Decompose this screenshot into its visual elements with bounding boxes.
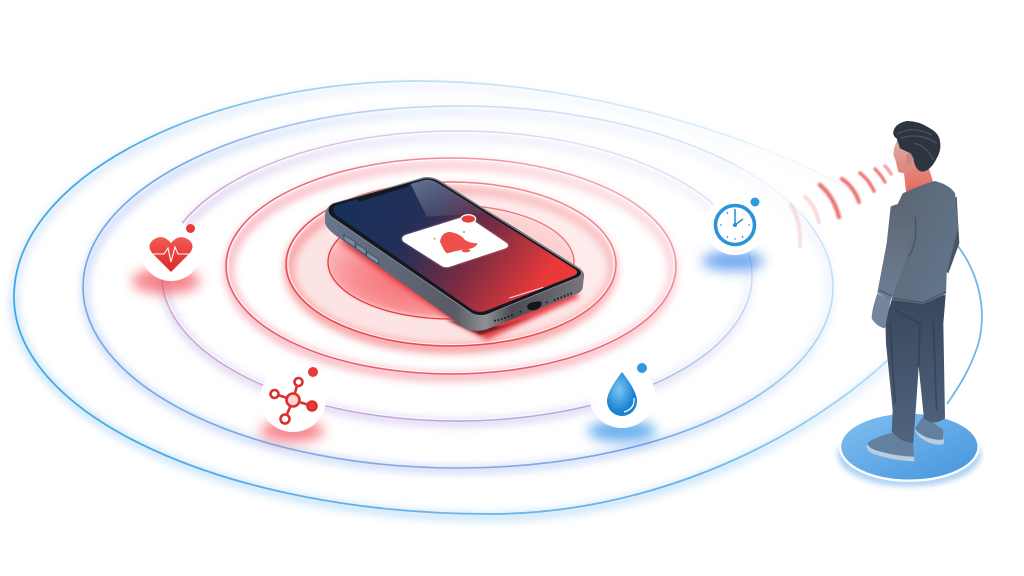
- sound waves toward person: [791, 166, 891, 246]
- hair: [893, 121, 940, 172]
- bell icon: [440, 232, 478, 253]
- ring 4: pink red: [226, 158, 676, 377]
- icon: heart badge: [132, 221, 201, 294]
- neck and face: [893, 139, 933, 192]
- sweater folds: [879, 217, 946, 303]
- ear: [906, 153, 912, 165]
- sweater torso: [892, 181, 958, 304]
- alert card: [402, 215, 508, 267]
- hair strands: [897, 130, 937, 160]
- icon: clock badge: [702, 195, 765, 271]
- ring 1: outer blue: [14, 81, 888, 517]
- icon: water drop badge: [588, 362, 656, 442]
- screen sheen: [411, 180, 487, 217]
- infographic scene: [6, 80, 984, 526]
- phone glow shadow: [337, 240, 580, 340]
- wave arcs: [791, 166, 891, 246]
- person on platform: [838, 121, 981, 487]
- ring 1 right arc behind person: [947, 245, 982, 404]
- ring 3: violet: [162, 131, 752, 423]
- platform disc: [840, 413, 979, 481]
- phone screen: [333, 180, 577, 312]
- far arm: [945, 197, 959, 273]
- back shoe: [915, 416, 944, 445]
- home bar: [509, 287, 543, 298]
- outer rings with faded tops: [14, 81, 888, 517]
- inner rings: [226, 158, 676, 377]
- trousers: [885, 295, 946, 443]
- notification dot: [461, 215, 476, 223]
- ring 5: red: [286, 182, 616, 349]
- phone contact shadow: [447, 317, 533, 335]
- ring 6: inner red core: [328, 205, 574, 319]
- near arm: [877, 204, 915, 301]
- side buttons: [344, 235, 379, 264]
- icon: molecule network badge: [260, 366, 326, 442]
- platform shadow: [838, 423, 981, 487]
- phone metal bezel: [328, 178, 581, 316]
- hand: [872, 293, 891, 328]
- charging port and speaker: [494, 292, 572, 322]
- phone body: [325, 177, 584, 331]
- phone: [325, 177, 584, 340]
- ring 2: blue-violet: [83, 106, 833, 470]
- front shoe: [867, 433, 914, 461]
- trouser shading: [890, 310, 937, 410]
- concentric signal rings: [14, 81, 982, 517]
